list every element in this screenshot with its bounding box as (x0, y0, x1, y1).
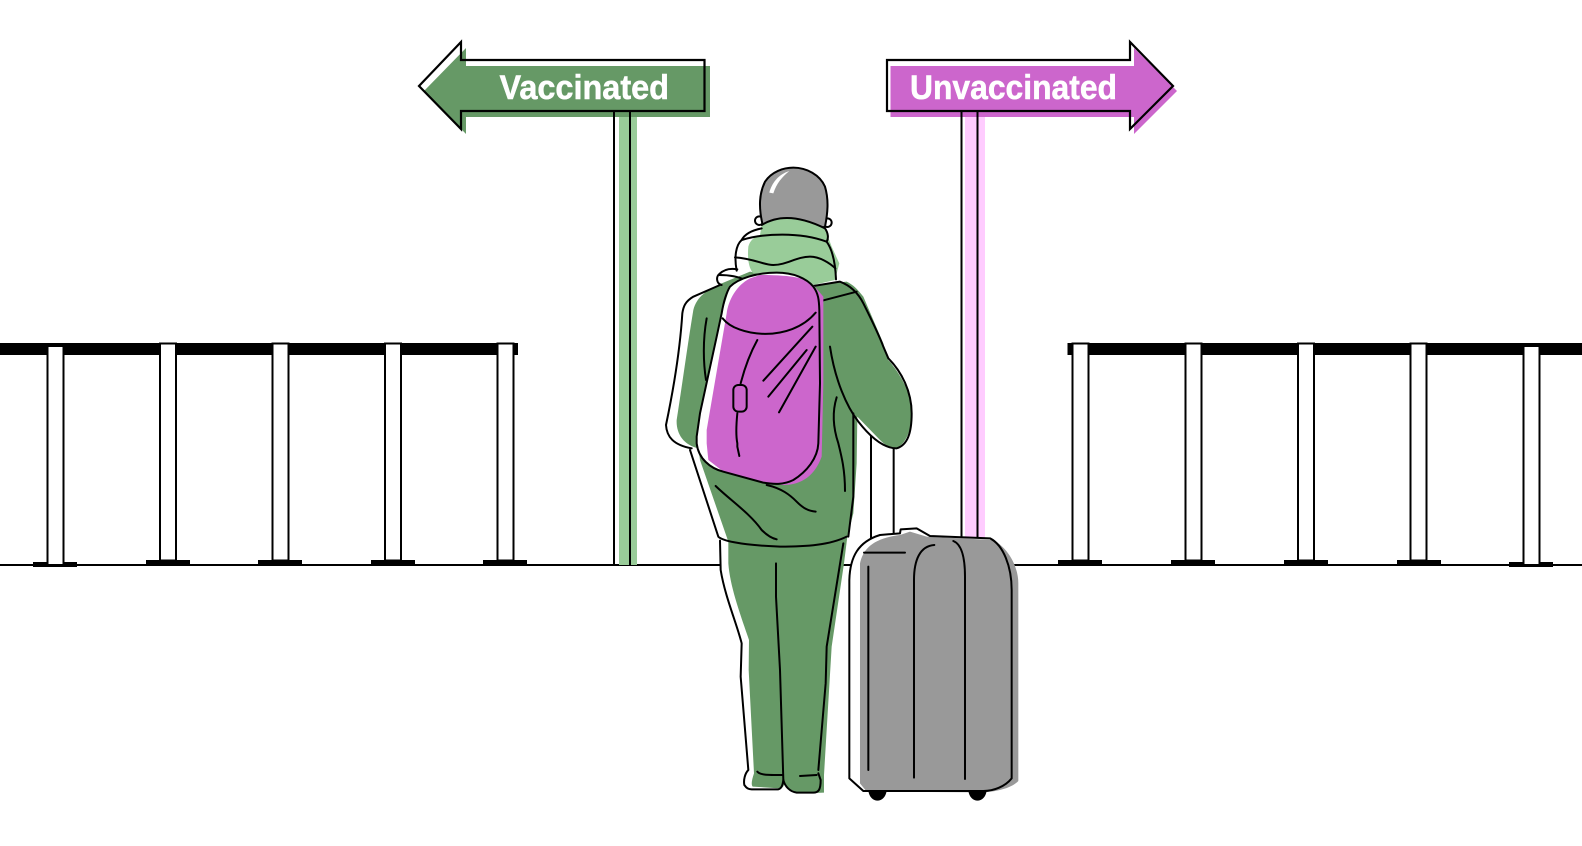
label: Vaccinated: Vaccinated (500, 69, 669, 107)
backpack pocket (723, 313, 816, 334)
suitcase outline (849, 528, 1012, 791)
post: Vaccinated sign (614, 111, 637, 565)
scarf (735, 218, 839, 285)
suitcase handle (871, 413, 894, 540)
suitcase white base (849, 528, 1012, 791)
arrow fill: pointing left (424, 48, 710, 134)
head (755, 168, 832, 237)
arrow outline: pointing right (887, 42, 1173, 129)
backpack (697, 273, 823, 485)
sign: Unvaccinated (887, 42, 1177, 541)
suitcase (849, 413, 1018, 801)
white silhouette (666, 268, 912, 793)
left queue barrier (0, 343, 527, 567)
arrow fill: pointing right (890, 48, 1177, 134)
suitcase seams (864, 541, 965, 779)
jacket outline (666, 269, 912, 547)
green jacket and trousers (677, 272, 912, 793)
arrow outline: pointing left (419, 42, 704, 129)
suitcase wheels (868, 791, 987, 801)
label: Unvaccinated: Unvaccinated (910, 69, 1117, 107)
right queue barrier (1058, 343, 1582, 567)
backpack folds (763, 327, 816, 412)
backpack zip and tab (733, 340, 757, 456)
person seen from behind (666, 168, 912, 793)
suitcase grey body (860, 532, 1018, 792)
trousers outline (720, 541, 843, 793)
sign: Vaccinated (419, 42, 710, 565)
post: Unvaccinated sign (962, 111, 985, 541)
